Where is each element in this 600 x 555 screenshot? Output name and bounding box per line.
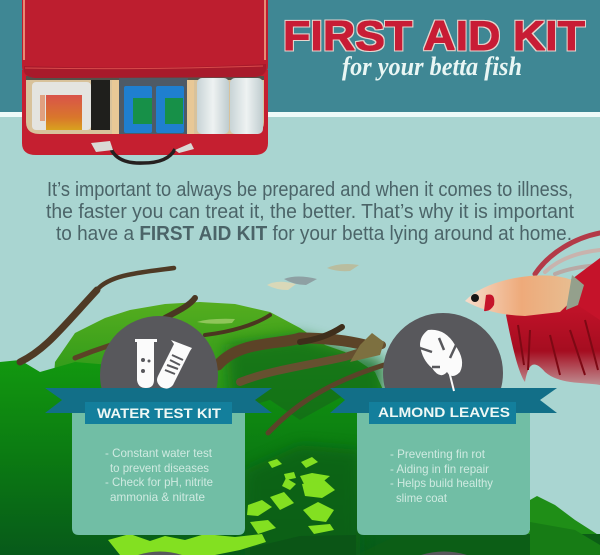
subtitle: for your betta fish <box>342 52 522 81</box>
betta fish <box>465 233 600 385</box>
card text: - Aiding in fin repair <box>390 462 489 476</box>
upper fin rays <box>535 233 600 274</box>
card text: slime coat <box>396 491 448 505</box>
header band <box>0 0 600 117</box>
title <box>283 12 585 81</box>
lower fin <box>506 300 600 385</box>
dark shade <box>245 445 360 555</box>
intro text: the faster you can treat it, the better. That’s why it is important <box>46 201 574 223</box>
dark shade behind branches <box>225 335 384 440</box>
case lid <box>22 0 268 78</box>
small fish <box>197 264 359 324</box>
body <box>465 275 578 316</box>
bottom leaf shadow <box>250 535 356 555</box>
card heading: ALMOND LEAVES <box>378 404 510 420</box>
card text: - Check for pH, nitrite <box>105 475 213 489</box>
right ground <box>400 496 600 555</box>
panel: water test kit <box>45 316 272 535</box>
ribbon wings <box>45 388 272 413</box>
case body <box>22 70 268 155</box>
card text: - Constant water test <box>105 446 213 460</box>
handle <box>91 141 194 163</box>
icon circle <box>383 313 503 433</box>
next icon circle tops <box>138 552 467 555</box>
card <box>72 413 245 535</box>
card text: - Preventing fin rot <box>390 447 486 461</box>
title: FIRST AID KIT <box>283 12 585 59</box>
bright leaves <box>108 457 335 555</box>
card text: to prevent diseases <box>110 461 209 475</box>
tail fin <box>568 258 600 385</box>
white rolls <box>197 78 263 134</box>
ribbon wings <box>330 388 557 413</box>
black bottle <box>91 80 110 130</box>
card text: - Helps build healthy <box>390 476 493 490</box>
panel: almond leaves <box>330 313 557 535</box>
card text: ammonia & nitrate <box>110 490 205 504</box>
icon: test tubes <box>135 339 192 389</box>
intro text: to have a FIRST AID KIT for your betta lying around at home. <box>56 223 572 245</box>
front foliage <box>0 360 400 555</box>
card heading: WATER TEST KIT <box>97 405 221 421</box>
aquarium plants <box>0 302 600 555</box>
card text <box>105 446 213 504</box>
card text <box>390 447 493 505</box>
ribbon front <box>85 402 232 424</box>
icon circle <box>100 316 218 434</box>
back hill <box>40 302 400 555</box>
case interior <box>26 76 264 134</box>
blue bottle left <box>124 86 152 133</box>
driftwood <box>20 268 384 433</box>
blue bottle right <box>156 86 184 133</box>
ribbon front <box>369 402 516 424</box>
medicine bottle <box>32 82 91 130</box>
icon: leaf <box>420 330 462 391</box>
icon: first aid case <box>22 0 268 163</box>
intro text <box>46 179 574 245</box>
card <box>357 413 530 535</box>
gill <box>484 294 494 311</box>
gill shimmer <box>566 275 584 310</box>
wood branch tip <box>350 333 384 362</box>
eye <box>471 294 479 302</box>
